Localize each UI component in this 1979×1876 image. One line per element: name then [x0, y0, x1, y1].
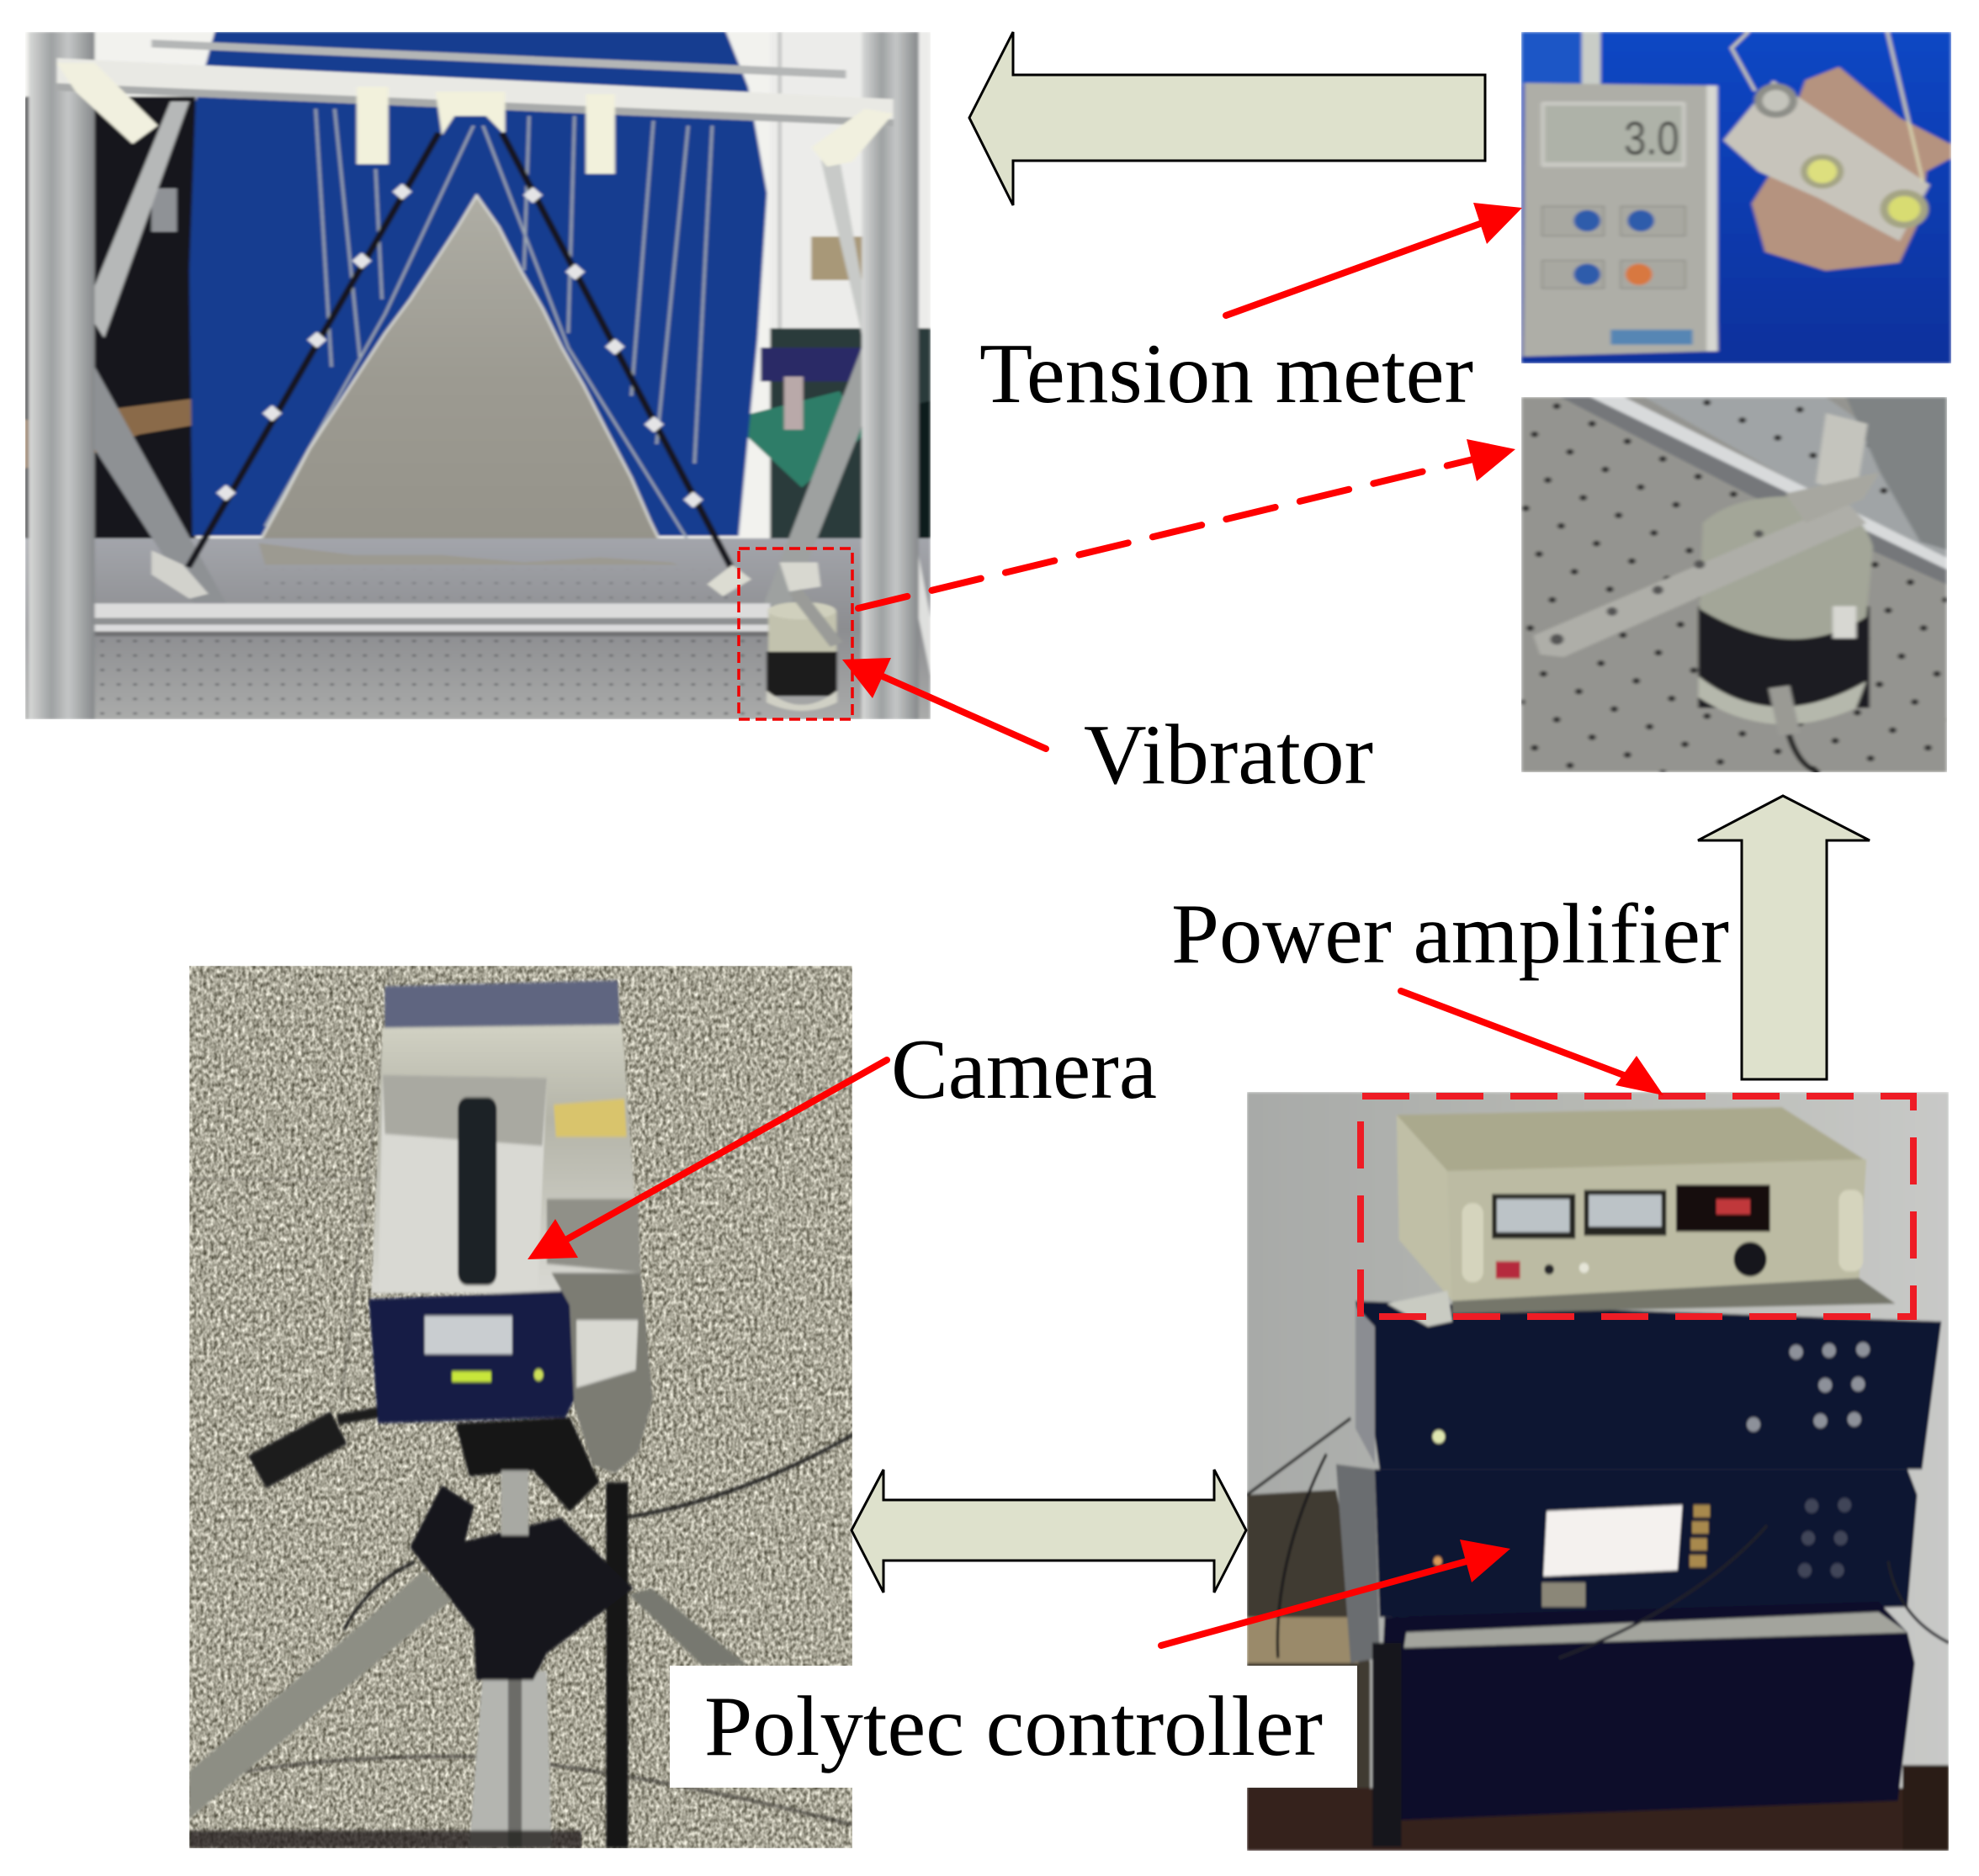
rail: [1560, 397, 1947, 585]
frame post: [1846, 397, 1947, 550]
sensor head: [1723, 80, 1929, 241]
columns: [29, 32, 95, 719]
connector and cable: [1769, 686, 1800, 736]
top beams: [57, 58, 894, 126]
arrow: power amplifier pointer: [1401, 991, 1663, 1095]
panel: controller rack photo: [1247, 1092, 1949, 1851]
label background: polytec controller: [670, 1666, 1357, 1788]
camera front: [369, 1290, 574, 1423]
panel: membrane test rig photo: [25, 32, 931, 719]
rack knobs: [1747, 1343, 1870, 1432]
vibrator: [767, 589, 843, 711]
label: Vibrator: Vibrator: [1084, 707, 1373, 803]
aluminium floor table: [25, 538, 931, 719]
panel: vibrator close-up photo: [1521, 397, 1947, 772]
label: Power amplifier: Power amplifier: [1171, 887, 1729, 982]
lower beam: [95, 603, 770, 635]
display reading: 3.0: [1624, 112, 1679, 165]
cable connector: [551, 1273, 653, 1473]
camera body: [385, 981, 620, 1028]
label: Polytec controller: Polytec controller: [704, 1679, 1323, 1774]
panel: tension meter photo: [1521, 32, 1951, 363]
arrow: vibrator pointer: [842, 658, 1046, 749]
callout box: vibrator dashed highlight: [739, 548, 852, 719]
power amplifier unit: [1387, 1107, 1896, 1327]
label: Tension meter: Tension meter: [979, 326, 1473, 421]
shaker body: [1698, 606, 1870, 708]
arrow: dashed link to vibrator close-up: [858, 439, 1515, 608]
white brackets: [57, 63, 158, 144]
tripod legs: [189, 1571, 451, 1819]
frame diagonals: [85, 352, 231, 616]
meter body: [1523, 83, 1718, 357]
block arrow: up, amplifier to vibrator: [1698, 796, 1870, 1079]
hand: [1752, 66, 1951, 271]
screen: [1543, 1505, 1682, 1577]
fabric membrane: [259, 195, 671, 563]
keypad: [1542, 206, 1685, 289]
corner clamps: [151, 550, 209, 599]
label: Camera: Camera: [891, 1022, 1157, 1117]
panel: laser camera on tripod photo: [189, 966, 852, 1848]
callout box: power amplifier dashed highlight: [1361, 1096, 1913, 1317]
tripod head: [410, 1485, 634, 1680]
handle: [248, 1412, 348, 1488]
arrow: camera pointer: [528, 1060, 887, 1259]
metal strap: [1533, 501, 1866, 657]
arrow: polytec controller pointer: [1161, 1539, 1510, 1645]
block arrow: double, camera and controller: [852, 1470, 1246, 1592]
arrow: tension meter pointer: [1226, 203, 1522, 315]
rack stack: [1356, 1301, 1941, 1470]
black cables with markers: [188, 133, 732, 570]
block arrow: left, output to rig: [969, 32, 1485, 205]
